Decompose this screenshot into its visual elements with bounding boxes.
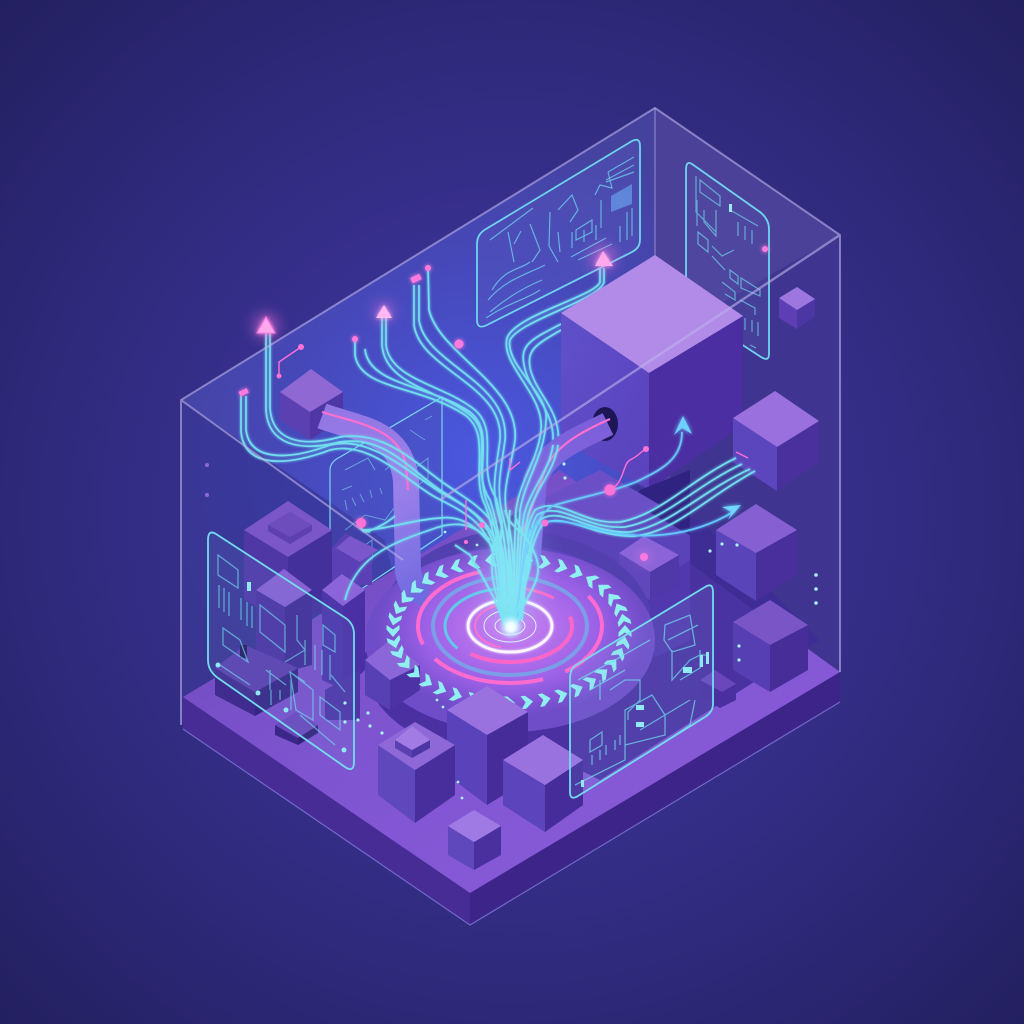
cube: front centre tall (447, 686, 528, 805)
panel: circuit middle wall (330, 397, 442, 603)
small low block (275, 712, 318, 745)
fountain (492, 530, 506, 625)
cube: right (322, 574, 365, 690)
fountain glow (485, 510, 537, 630)
panel: circuit back right wall (686, 163, 769, 359)
panel: circuit front right (570, 585, 713, 798)
arrow: pink 1 (257, 317, 275, 333)
cube socket (592, 407, 618, 441)
dark low block (215, 645, 298, 716)
icon: right cube lower (733, 600, 808, 692)
block right low (325, 670, 360, 720)
hub core (498, 614, 524, 640)
cube: tall back (244, 501, 332, 620)
cube: front small (448, 810, 501, 870)
pink caps (239, 246, 768, 396)
left cube cluster (215, 501, 378, 745)
left low branches (345, 524, 490, 600)
centre left (382, 318, 507, 620)
hub disc (365, 530, 655, 757)
left cube (280, 369, 343, 440)
centre right (514, 430, 541, 620)
glass rim lines (181, 108, 840, 725)
cube: front left with cap (378, 722, 455, 823)
arrow: pink 3 (595, 251, 613, 266)
arrow glows (254, 246, 615, 338)
pink nodes and arrowheads (239, 246, 768, 544)
icon: small cube on slab right (700, 670, 736, 708)
cube: front right (503, 735, 583, 832)
icon: right cube middle (716, 504, 797, 601)
cube: back mid (332, 533, 378, 585)
fiber bundle tree (241, 268, 755, 625)
platform slab (183, 470, 840, 925)
arrow ring (386, 553, 632, 710)
block at disc left (365, 640, 420, 710)
cube: centre (256, 569, 312, 672)
mid blocks behind hub (540, 470, 690, 660)
panel: circuit front left (208, 532, 354, 769)
glass enclosure back walls (181, 108, 840, 900)
left pipe (322, 412, 428, 594)
arrow: pink 2 (376, 305, 392, 318)
arrow: blue up (674, 416, 692, 435)
front cubes (378, 686, 583, 870)
icon: small floating cube (779, 287, 815, 329)
back dark block (620, 470, 690, 560)
left bundle (266, 333, 505, 620)
fibers behind big cube (506, 268, 604, 510)
dark interior mass (360, 500, 820, 780)
icon: big cube (561, 255, 743, 490)
right pipe (520, 419, 610, 565)
rings (418, 569, 602, 683)
pink traces (279, 347, 748, 530)
right bundle (519, 458, 736, 620)
data particles (205, 462, 818, 799)
panel: circuit back left wall (477, 140, 640, 327)
icon: cap block with pink node (619, 536, 679, 600)
arrow: blue right (722, 505, 741, 520)
icon: right cube upper (733, 391, 819, 491)
